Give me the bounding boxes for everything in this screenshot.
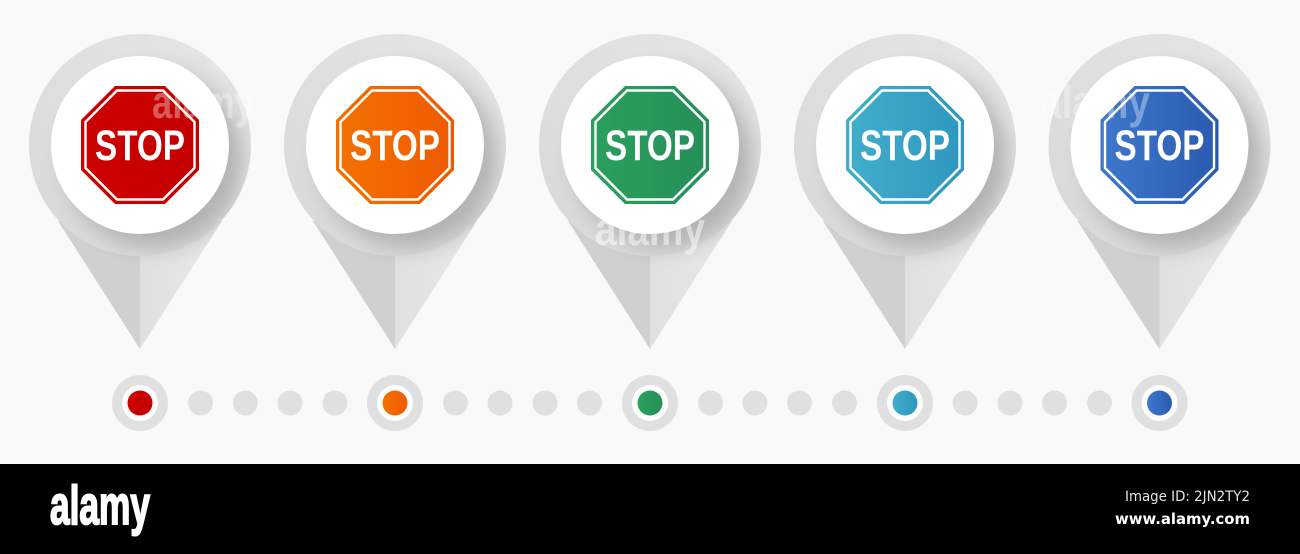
alamy logo: alamy: [50, 474, 150, 536]
website: www.alamy.com: [1115, 510, 1250, 528]
watermarks: alamy: [152, 76, 255, 128]
connector dots 4: [952, 390, 1112, 416]
pin 5: blue stop sign: [1048, 34, 1270, 349]
stop sign: STOP: [605, 122, 695, 170]
watermarks: alamy: [1040, 76, 1150, 128]
stop sign: [1100, 86, 1218, 204]
pin 3: green stop sign: [539, 34, 761, 349]
stop sign: [336, 86, 454, 204]
stop sign: STOP: [95, 122, 185, 170]
marker: green: [622, 375, 678, 431]
connector dots 2: [443, 390, 602, 416]
stop sign: [846, 86, 964, 204]
pin body: [539, 34, 761, 349]
stop sign: STOP: [350, 122, 440, 170]
marker: blue: [1132, 375, 1188, 431]
marker: teal: [877, 375, 933, 431]
pin 1: red stop sign: [29, 34, 251, 349]
marker: red: [112, 375, 168, 431]
pin body: [29, 34, 251, 349]
watermarks: alamy: [595, 203, 705, 255]
pin body: [284, 34, 506, 349]
pin body: [1048, 34, 1270, 349]
marker: orange: [367, 375, 423, 431]
image id: Image ID: 2JN2TY2: [1125, 489, 1250, 505]
footer bar: [0, 464, 1300, 554]
pin body: [794, 34, 1016, 349]
watermarks: [152, 76, 1150, 255]
connector dots 1: [188, 390, 347, 416]
stop sign: STOP: [1114, 122, 1204, 170]
timeline dots: [112, 375, 1188, 431]
stop sign: [81, 86, 199, 204]
pin 4: teal stop sign: [794, 34, 1016, 349]
stop sign: STOP: [860, 122, 950, 170]
pin 2: orange stop sign: [284, 34, 506, 349]
connector dots 3: [698, 390, 857, 416]
stop sign: [591, 86, 709, 204]
